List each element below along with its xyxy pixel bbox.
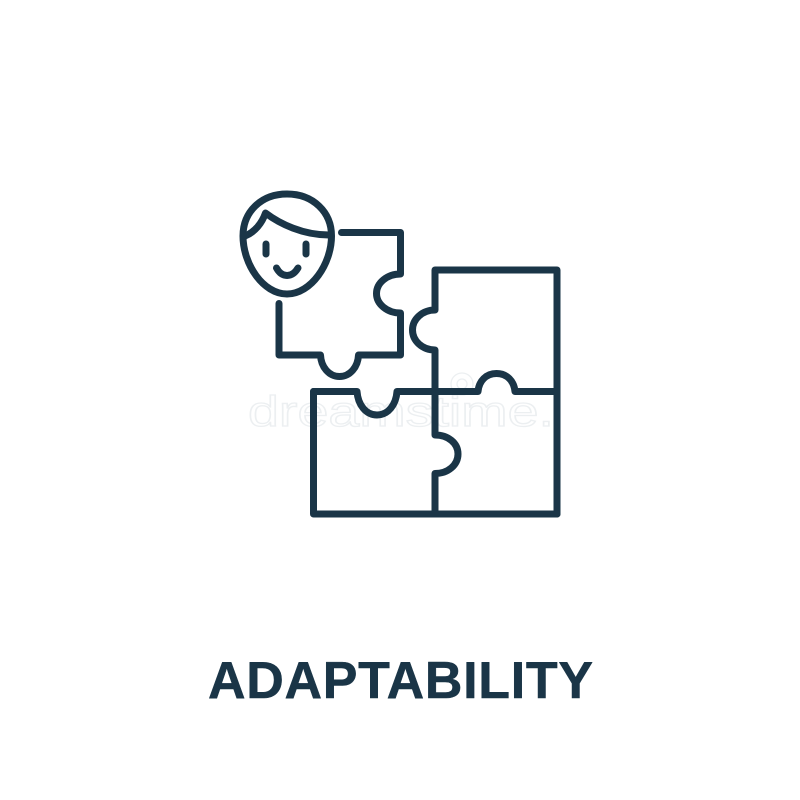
icon: adaptability puzzle with person [243, 194, 557, 514]
title: ADAPTABILITY [208, 652, 593, 710]
watermark: dreamstime. [248, 388, 554, 436]
icon: hair [245, 213, 329, 236]
icon: right eye [302, 244, 310, 254]
icon: centre horizontal seam [314, 374, 557, 415]
icon: top right puzzle piece [412, 270, 557, 514]
icon: detached puzzle piece [279, 232, 400, 376]
icon: bottom left puzzle outline [314, 392, 557, 514]
icon: smile [276, 268, 298, 276]
icon: left eye [262, 244, 270, 254]
icon: person face [243, 194, 332, 294]
icon: head outline [243, 194, 332, 294]
watermark [248, 373, 554, 436]
